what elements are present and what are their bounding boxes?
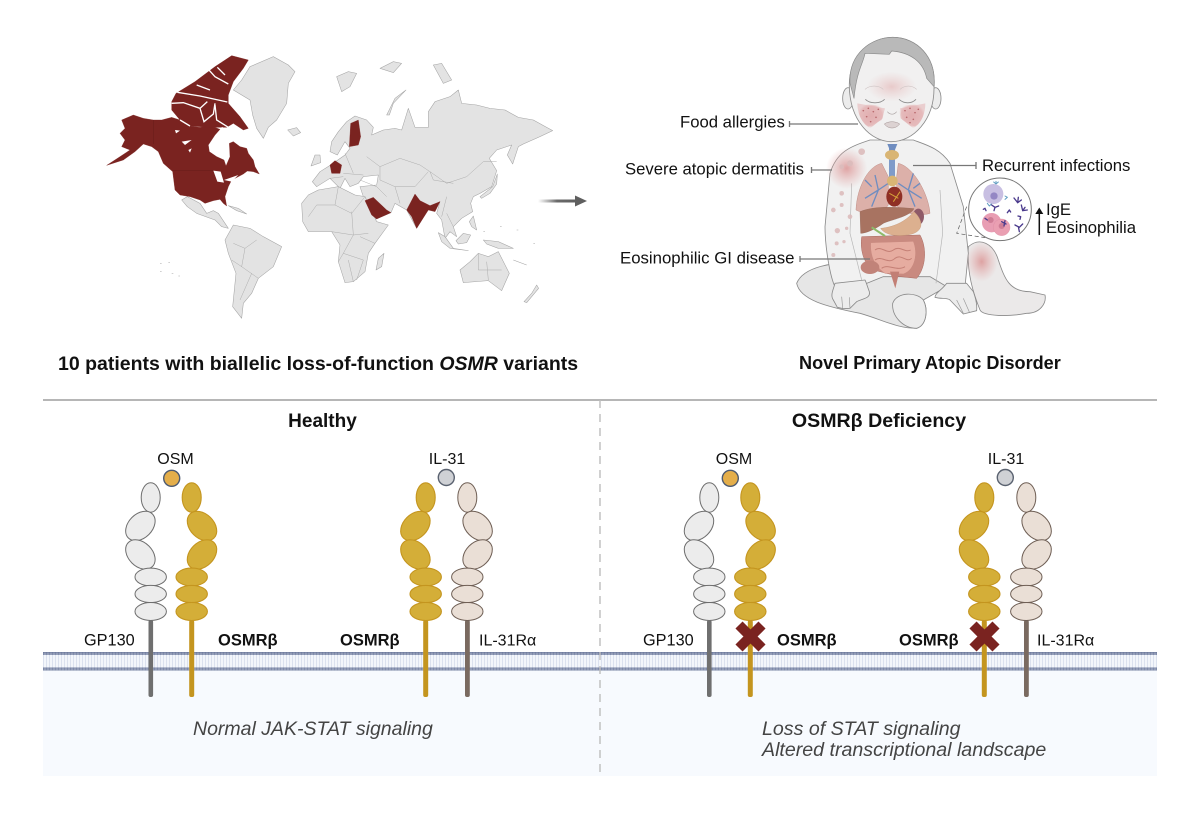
- receptor: GP130 with OSM: OSM: [157, 451, 194, 468]
- panel: OSMR beta deficiency: [643, 410, 1094, 761]
- label: severe atopic dermatitis: Severe atopic dermatitis: [625, 160, 804, 178]
- receptor: IL-31R alpha with IL-31: IL-31Rα: [479, 633, 536, 650]
- inset: mast cell: [983, 181, 1007, 206]
- panel: healthy: [84, 411, 536, 740]
- receptor: defective OSMR beta with GP130: OSMRβ: [777, 632, 837, 650]
- inset: IgE antibodies: [983, 197, 1027, 232]
- infant: head: [843, 37, 941, 142]
- caption: loss of signaling: Loss of STAT signaling: [762, 718, 961, 740]
- heading: OSMR beta deficiency: OSMRβ Deficiency: [792, 410, 966, 432]
- infant: arm and knee rash: [826, 148, 998, 282]
- title: patients caption: 10 patients with biallelic loss-of-function OSMR variants: [58, 353, 578, 375]
- receptor: OSMR beta paired with IL-31R alpha: [340, 483, 441, 697]
- map: highlighted North America: [107, 56, 259, 206]
- receptor: OSMR beta paired with IL-31R alpha: OSMRβ: [340, 632, 400, 650]
- icon: red cross: [739, 625, 762, 648]
- map: highlighted Saudi Arabia: [365, 197, 391, 219]
- label: recurrent infections: Recurrent infections: [982, 156, 1130, 175]
- indicator: raised IgE and eosinophilia: Eosinophilia: [1046, 218, 1137, 237]
- receptor: GP130 with OSM: [84, 451, 194, 697]
- indicator: raised IgE and eosinophilia: [1035, 200, 1137, 237]
- title: phenotype caption: Novel Primary Atopic Disorder: [799, 353, 1061, 373]
- label: eosinophilic GI disease: [620, 248, 870, 268]
- caption: loss of signaling: Altered transcriptional landscape: [761, 739, 1046, 761]
- heading: healthy: Healthy: [288, 411, 357, 432]
- receptor: IL-31R alpha with IL-31, deficient side: IL-31: [988, 451, 1024, 468]
- inset: eosinophils: [982, 213, 1010, 236]
- panel: cell membrane and cytoplasm: [43, 652, 1157, 776]
- panel: world map of patient origins: [107, 56, 553, 318]
- receptor: defective OSMR beta with IL-31R alpha: [899, 483, 1000, 697]
- receptor: OSMR beta paired with GP130: OSMRβ: [218, 632, 278, 650]
- map: grey land masses: [160, 57, 553, 318]
- icon: red cross: [973, 625, 996, 648]
- map: highlighted Germany: [330, 161, 342, 173]
- indicator: raised IgE and eosinophilia: IgE: [1046, 200, 1071, 219]
- label: food allergies: Food allergies: [680, 112, 785, 132]
- map: highlighted India: [407, 194, 440, 228]
- infant: torso and arms: [825, 140, 977, 314]
- receptor: defective OSMR beta with IL-31R alpha: OSMRβ: [899, 632, 959, 650]
- receptor: OSMR beta paired with GP130: [176, 483, 278, 697]
- infant: legs and feet: [797, 242, 1045, 328]
- receptor: IL-31R alpha with IL-31: [429, 451, 536, 697]
- infant: organs: [856, 144, 930, 288]
- receptor: defective OSMR beta with GP130: [735, 483, 837, 697]
- receptor: GP130 with OSM, deficient side: [643, 451, 752, 697]
- receptor: IL-31R alpha with IL-31, deficient side: [988, 451, 1094, 697]
- receptor: IL-31R alpha with IL-31: IL-31: [429, 451, 465, 468]
- receptor: IL-31R alpha with IL-31, deficient side: IL-31Rα: [1037, 633, 1094, 650]
- illustration: infant with affected organs: [797, 37, 1045, 328]
- arrow: map to phenotype: [538, 196, 587, 206]
- inset: blood cells and antibodies: [969, 178, 1031, 241]
- label: eosinophilic GI disease: Eosinophilic GI disease: [620, 248, 794, 268]
- label: recurrent infections: [913, 156, 1130, 175]
- caption: normal signaling: Normal JAK-STAT signaling: [193, 718, 433, 740]
- receptor: GP130 with OSM, deficient side: GP130: [643, 632, 694, 650]
- receptor: GP130 with OSM, deficient side: OSM: [716, 451, 752, 468]
- label: food allergies: [680, 112, 858, 132]
- caption: loss of signaling: [761, 718, 1046, 761]
- receptor: GP130 with OSM: GP130: [84, 632, 135, 650]
- map: highlighted Finland: [349, 120, 361, 147]
